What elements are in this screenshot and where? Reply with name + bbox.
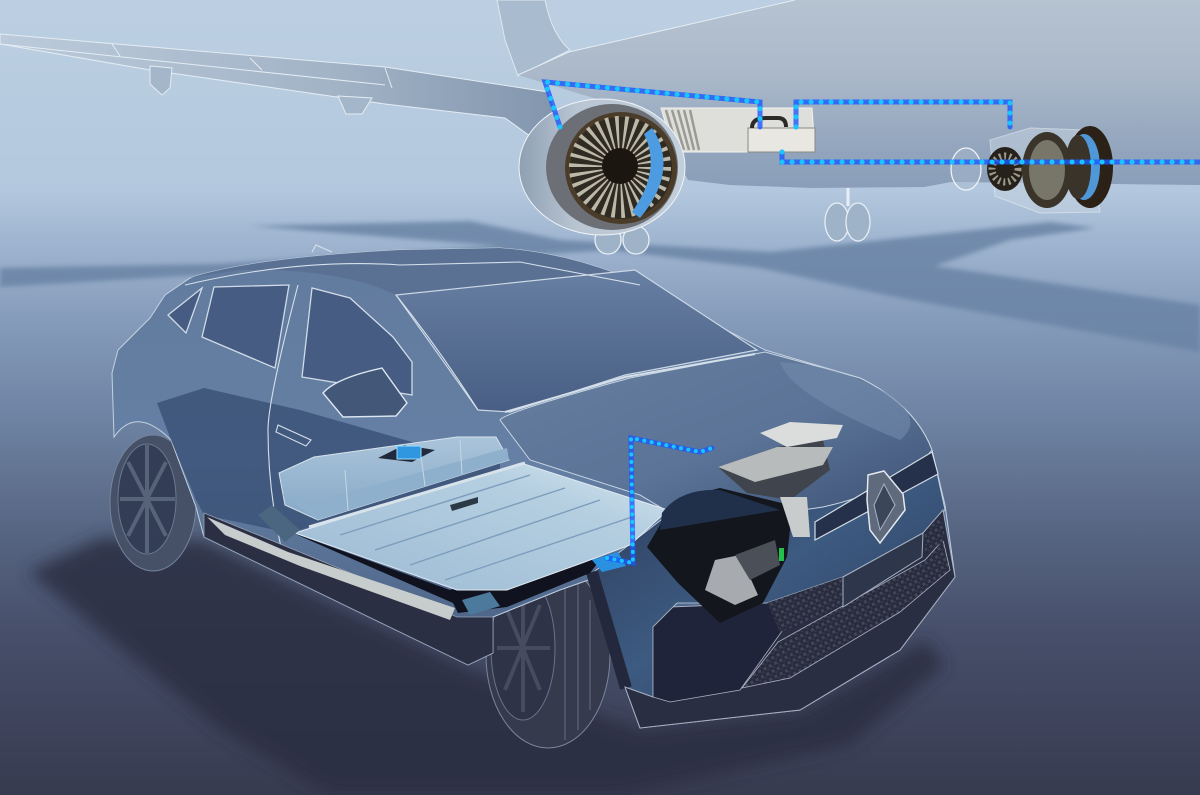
lower mesh xyxy=(742,540,950,688)
fuselage xyxy=(518,0,1200,188)
light strip band xyxy=(815,452,938,540)
fan blades xyxy=(587,134,653,200)
sill dark xyxy=(204,513,493,665)
main engine xyxy=(519,99,685,235)
lower fascia xyxy=(625,510,955,728)
ground shadow: aircraft xyxy=(0,221,1200,352)
front wheel xyxy=(486,562,610,748)
lower door shading xyxy=(157,388,500,533)
generator box xyxy=(661,108,815,152)
aircraft xyxy=(0,0,1200,254)
fender xyxy=(590,450,945,697)
upper mesh xyxy=(767,577,843,632)
rear engine cutaway xyxy=(951,126,1113,213)
battery connectors xyxy=(258,505,626,615)
battery tray xyxy=(293,463,668,613)
hood crease xyxy=(780,362,910,440)
roof panel xyxy=(190,248,620,295)
power lines: aircraft xyxy=(545,82,1200,162)
wing with pods xyxy=(0,34,560,136)
door and roof lines xyxy=(185,245,640,572)
ground shadow: car xyxy=(28,538,945,795)
power line: car xyxy=(607,438,712,563)
motor assembly xyxy=(647,422,843,623)
rear wheel xyxy=(110,435,196,571)
car xyxy=(110,245,955,748)
sill light strip xyxy=(207,517,455,620)
hood xyxy=(500,352,932,515)
wing mirror xyxy=(323,368,407,417)
right mesh xyxy=(925,515,945,555)
body shell xyxy=(112,248,955,728)
wheel arch band xyxy=(592,572,626,688)
left intake xyxy=(653,603,790,702)
landing gear xyxy=(595,188,870,254)
battery upper module xyxy=(279,437,509,520)
tail fin xyxy=(497,0,570,76)
badge xyxy=(867,471,905,543)
side windows xyxy=(168,285,412,395)
plate xyxy=(843,533,923,607)
wiper strip xyxy=(505,354,755,412)
windshield xyxy=(396,270,757,412)
